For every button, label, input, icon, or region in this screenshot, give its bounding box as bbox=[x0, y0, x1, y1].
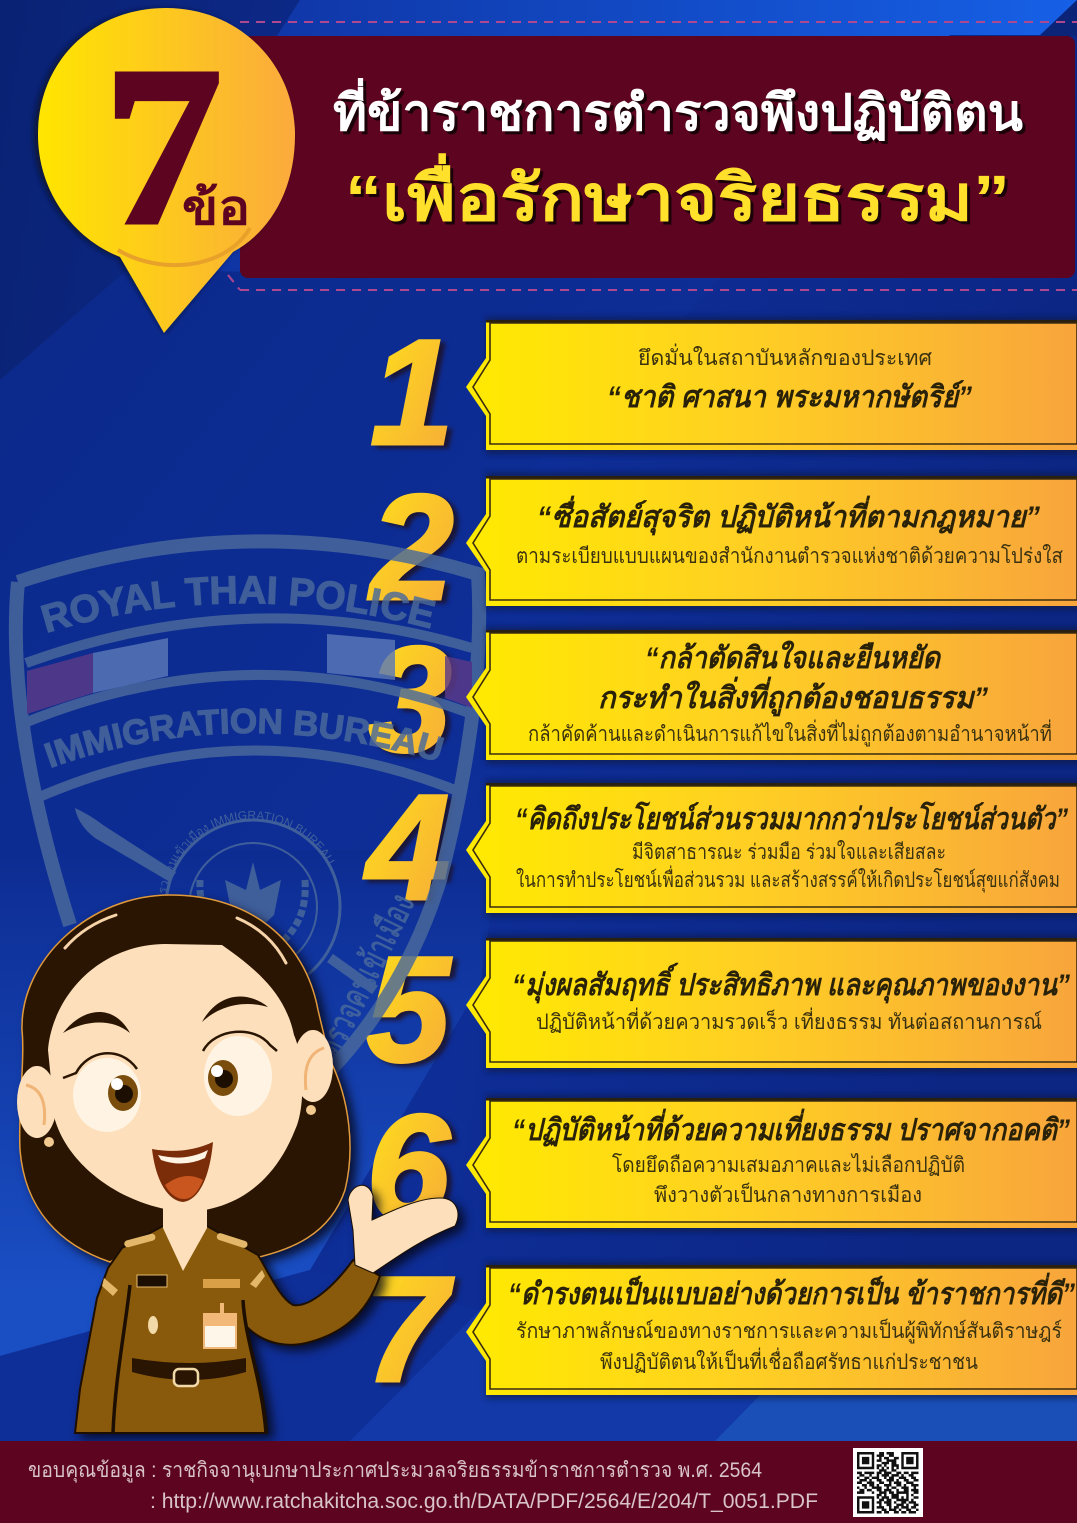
big numbers: 1 bbox=[370, 308, 454, 476]
id card bbox=[203, 1303, 237, 1349]
banner 6 bbox=[466, 1095, 1077, 1232]
text: ยึดมั่นในสถาบันหลักของประเทศ bbox=[638, 343, 933, 370]
flag stripes bbox=[27, 634, 472, 714]
uniform seams bbox=[113, 1285, 266, 1433]
big numbers: 6 bbox=[366, 1083, 451, 1251]
ears bbox=[17, 1030, 333, 1147]
banner 6: โดยยึดถือความเสมอภาคและไม่เลือกปฏิบัติ bbox=[612, 1153, 965, 1177]
title line 1: ที่ข้าราชการตำรวจพึงปฏิบัติตน bbox=[333, 78, 1023, 141]
text: “ซื่อสัตย์สุจริต ปฏิบัติหน้าที่ตามกฎหมาย” bbox=[537, 495, 1040, 536]
emblem bbox=[75, 808, 422, 1064]
banner 2 bbox=[466, 473, 1077, 610]
pin badge: 7 ข้อ bbox=[34, 8, 295, 333]
qr code bbox=[853, 1448, 923, 1517]
text: immigration bureau: IMMIGRATION BUREAU bbox=[44, 708, 444, 768]
banner 6: พึงวางตัวเป็นกลางทางการเมือง bbox=[654, 1181, 922, 1207]
banner 7: พึงปฏิบัติตนให้เป็นที่เชื่อถือศรัทธาแก่ประชาชน bbox=[600, 1347, 978, 1374]
big numbers: 7 bbox=[364, 1245, 454, 1413]
big numbers: 5 bbox=[366, 925, 452, 1093]
emblem: สำนักงานตรวจคนเข้าเมือง IMMIGRATION BUREAU bbox=[160, 810, 334, 893]
hair bbox=[20, 895, 350, 1262]
banner 3: กระทำในสิ่งที่ถูกต้องชอบธรรม” bbox=[598, 676, 988, 717]
header dashed lines bbox=[228, 22, 1077, 290]
big numbers: 4 bbox=[363, 763, 450, 931]
numeral 7: 7 bbox=[104, 21, 222, 271]
medals bbox=[203, 1279, 240, 1288]
banner 3 bbox=[466, 627, 1077, 764]
hair highlights bbox=[65, 915, 286, 963]
big numbers: 3 bbox=[368, 615, 452, 783]
body and arm bbox=[75, 1226, 380, 1433]
banner 5: ปฏิบัติหน้าที่ด้วยความรวดเร็ว เที่ยงธรรม ทันต่อสถานการณ์ bbox=[536, 1007, 1042, 1034]
hand bbox=[348, 1185, 458, 1273]
belt bbox=[132, 1358, 246, 1386]
banner 4: มีจิตสาธารณะ ร่วมมือ ร่วมใจและเสียสละ bbox=[632, 840, 946, 864]
text: royal thai police: ROYAL THAI POLICE bbox=[40, 576, 436, 633]
neck bbox=[163, 1205, 207, 1271]
face bbox=[48, 944, 302, 1212]
big numbers bbox=[363, 308, 454, 1413]
banner 7 bbox=[466, 1262, 1077, 1399]
name tag bbox=[137, 1275, 167, 1287]
footer bbox=[0, 1441, 1077, 1523]
eyes bbox=[63, 997, 277, 1132]
emblem: ตรวจคนเข้าเมือง bbox=[308, 887, 422, 1064]
banner 5 bbox=[466, 935, 1077, 1072]
source url: : http://www.ratchakitcha.soc.go.th/DATA/PDF/2564/E/204/T_0051.PDF bbox=[150, 1490, 818, 1513]
button bbox=[148, 1316, 158, 1334]
big numbers: 2 bbox=[367, 463, 454, 631]
label ข้อ: ข้อ bbox=[182, 182, 250, 235]
epaulets bbox=[102, 1232, 265, 1296]
header panel bbox=[240, 36, 1075, 278]
text: “กล้าตัดสินใจและยืนหยัด bbox=[645, 640, 941, 675]
watermark: immigration bureau shield bbox=[8, 534, 486, 1074]
banner 1 bbox=[466, 317, 1077, 454]
credit line: ขอบคุณข้อมูล : ราชกิจจานุเบกษาประกาศประมวลจริยธรรมข้าราชการตำรวจ พ.ศ. 2564 bbox=[28, 1459, 762, 1483]
banner 4 bbox=[466, 780, 1077, 917]
banner 1: “ชาติ ศาสนา พระมหากษัตริย์” bbox=[607, 380, 972, 414]
mouth bbox=[152, 1142, 213, 1202]
title line 2: “เพื่อรักษาจริยธรรม” bbox=[345, 153, 1010, 234]
character: police officer bbox=[17, 895, 458, 1433]
